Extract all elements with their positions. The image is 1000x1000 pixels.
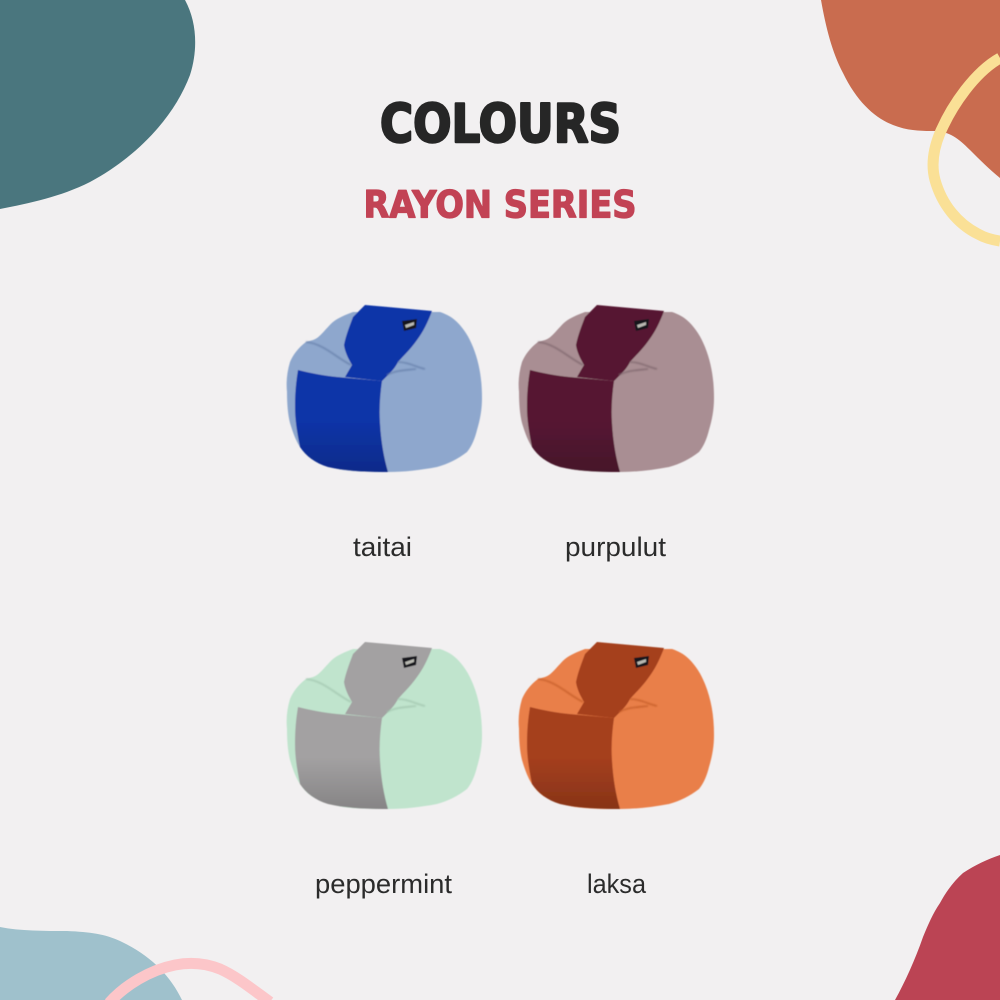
label: purpulut: purpulut — [565, 532, 667, 562]
bean bag: laksa — [519, 642, 714, 809]
decorative blob: teal top left — [0, 0, 195, 209]
label: taitai: taitai — [353, 532, 412, 562]
subtitle: RAYON SERIES — [364, 184, 636, 226]
title: COLOURS — [380, 94, 621, 155]
label: laksa: laksa — [587, 869, 647, 899]
decorative blob: orange top right — [821, 0, 1000, 178]
decorative ring: yellow top right — [933, 58, 1000, 241]
decorative blob: red bottom right — [895, 855, 1000, 1000]
bean bag: peppermint — [287, 642, 482, 809]
label: peppermint: peppermint — [315, 869, 452, 899]
bean bag: taitai — [287, 305, 482, 472]
decorative ring: pink bottom — [109, 963, 270, 1000]
decorative blob: light blue bottom left — [0, 927, 182, 1000]
bean bag: purpulut — [519, 305, 714, 472]
